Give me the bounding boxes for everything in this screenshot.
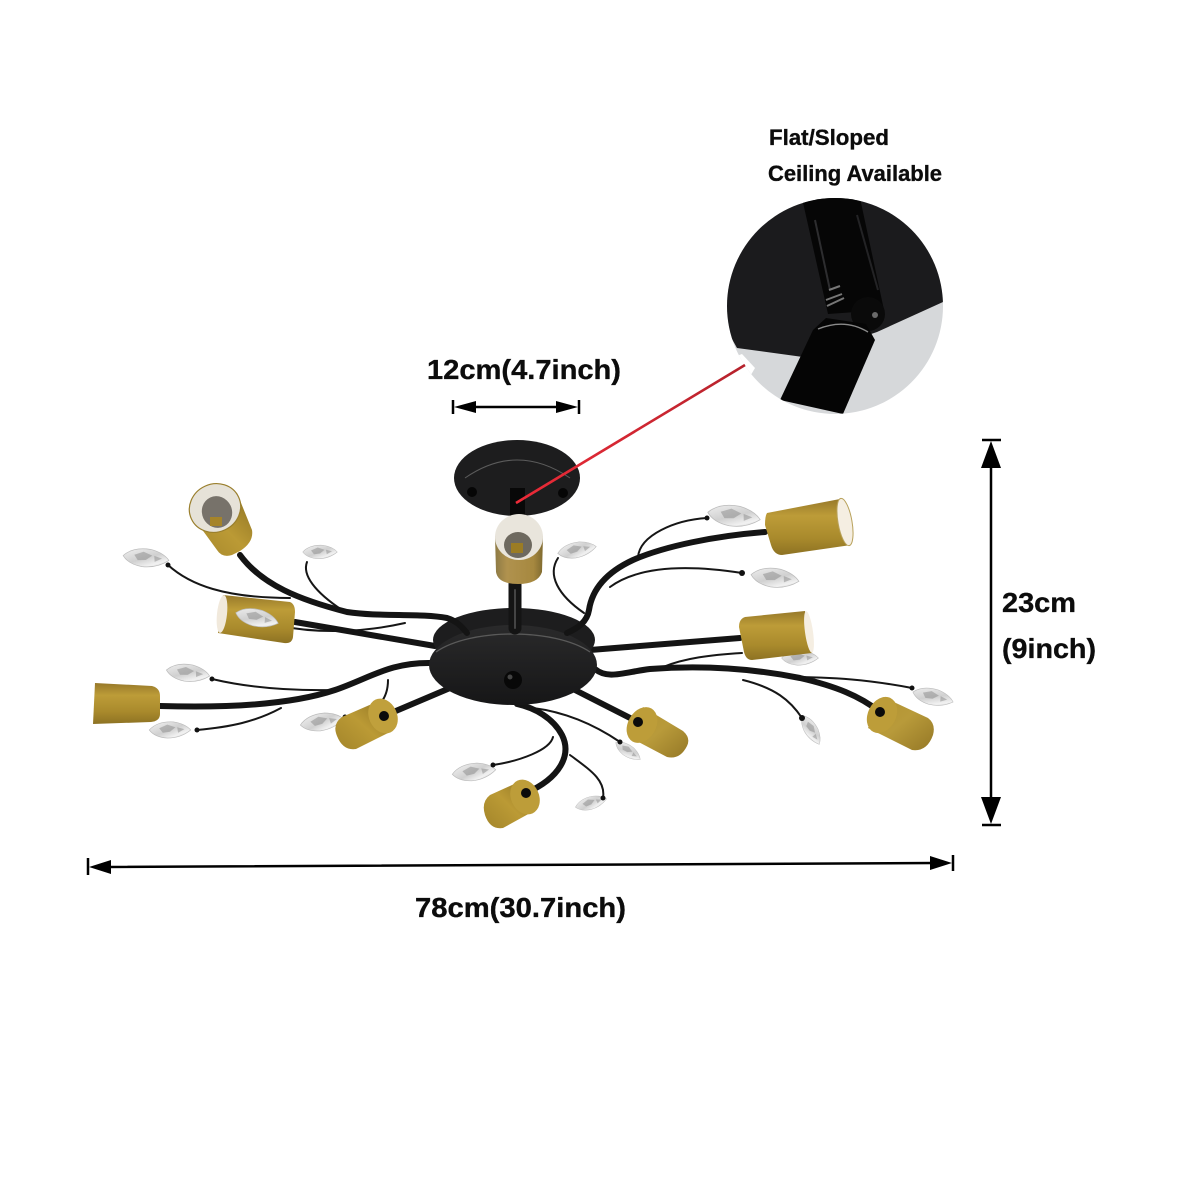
label: flat or sloped ceiling (768, 125, 942, 186)
lamp: lower left (335, 694, 403, 749)
label: total width: 78cm(30.7inch) (415, 892, 626, 923)
infographic: ceiling light dimension diagram (86, 128, 1095, 924)
lamp: far right (861, 692, 934, 750)
lamp: rear left (215, 595, 295, 643)
label: height (1002, 587, 1096, 664)
detail inset: sloped ceiling joint (726, 198, 943, 414)
arrow: total width (88, 855, 953, 875)
arms behind hub (160, 622, 880, 793)
arms on top of hub (240, 532, 765, 633)
lamp: bottom centre (484, 775, 545, 828)
lamp: far left (93, 683, 160, 724)
lamp: top right (765, 497, 856, 555)
red leader line (516, 365, 745, 503)
lamp: lower middle right (620, 702, 688, 758)
label: canopy width: 12cm(4.7inch) (427, 354, 621, 385)
label: height: (9inch) (1002, 633, 1096, 664)
label: height: 23cm (1002, 587, 1076, 618)
lamp: top left with open socket (181, 475, 252, 556)
ceiling canopy (454, 440, 580, 518)
label: flat or sloped ceiling: Ceiling Available (768, 161, 942, 186)
central hub (429, 608, 597, 705)
label: flat or sloped ceiling: Flat/Sloped (769, 125, 889, 150)
lamp: right middle (739, 611, 816, 660)
lamp: centre with open socket (495, 514, 543, 584)
crystals (122, 502, 955, 813)
wires and rear arms (168, 518, 912, 798)
arrow: canopy width (453, 400, 579, 414)
arrow: height (981, 440, 1001, 825)
